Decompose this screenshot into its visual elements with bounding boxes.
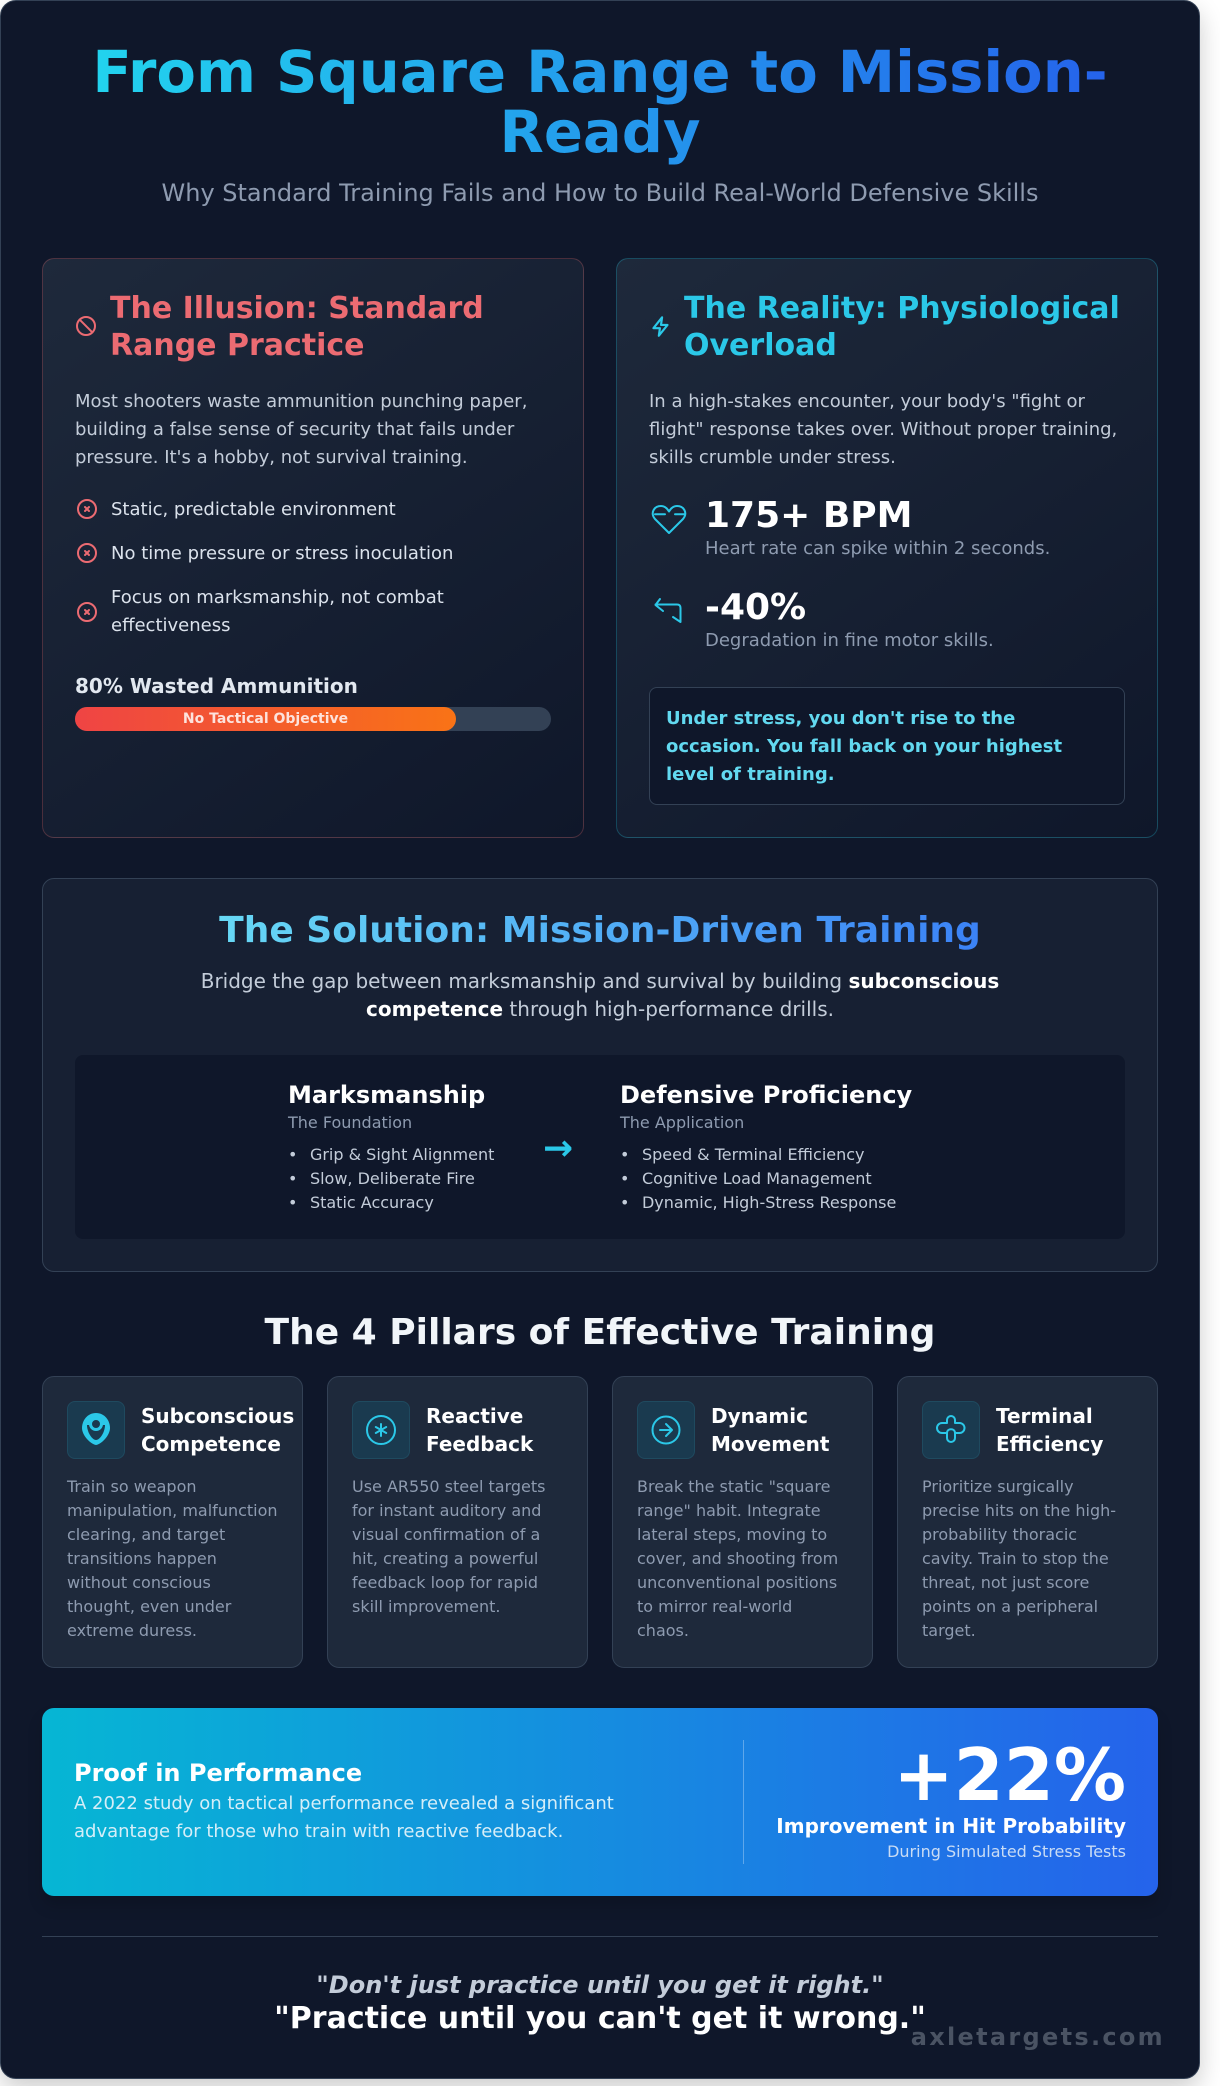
title: Movement [711, 1432, 829, 1456]
description [66, 1477, 278, 1640]
icon: cross target [922, 1401, 980, 1459]
arrow: → [543, 1128, 573, 1169]
text: illusion intro: pressure. It's a hobby, not survival training. [75, 446, 468, 468]
list: marksmanship skills: • Grip & Sight Alignment [288, 1145, 494, 1164]
text: illusion intro: Most shooters waste ammunition punching paper, [75, 390, 527, 412]
heading: proof: Proof in Performance [74, 1759, 362, 1787]
panel: comparison [75, 1055, 1125, 1239]
description: Break the static "square [637, 1477, 830, 1496]
icon: zap [652, 316, 669, 337]
icon: x circle [77, 602, 97, 622]
description: range" habit. Integrate [637, 1501, 821, 1520]
column: marksmanship [288, 1081, 494, 1212]
text: reality intro [649, 390, 1117, 468]
title: Reactive [426, 1404, 523, 1428]
caption: motor skills: Degradation in fine motor skills. [705, 630, 994, 651]
description: Prioritize surgically [922, 1477, 1074, 1496]
stat: motor skills [654, 587, 994, 651]
text: reality intro: In a high-stakes encounter, your body's "fight or [649, 390, 1085, 412]
callout: fall back on training: level of training. [666, 764, 835, 785]
title: Dynamic [711, 1404, 808, 1428]
panel: pillar reactive feedback [327, 1376, 588, 1668]
heading: the illusion: Range Practice [110, 328, 365, 362]
column: defensive proficiency [620, 1081, 912, 1212]
list: defensive skills [620, 1145, 896, 1212]
callout: fall back on training [649, 687, 1125, 805]
callout: fall back on training: Under stress, you don't rise to the [666, 708, 1015, 729]
description [637, 1477, 838, 1640]
item: static environment: Static, predictable environment [111, 498, 396, 520]
description: clearing, and target [67, 1525, 225, 1544]
item: marksmanship focus: effectiveness [111, 614, 230, 636]
description: visual confirmation of a [352, 1525, 540, 1544]
text: reality intro: flight" response takes over. Without proper training, [649, 418, 1117, 440]
icon: broken arrow [654, 598, 682, 623]
divider [743, 1740, 744, 1864]
heading: the solution: The Solution: Mission-Driven Training [219, 910, 981, 951]
description: to mirror real-world [637, 1597, 792, 1616]
description: Use AR550 steel targets [352, 1477, 545, 1496]
description: chaos. [637, 1621, 689, 1640]
text: study: A 2022 study on tactical performance revealed a significant [74, 1793, 614, 1814]
description: precise hits on the high- [922, 1501, 1116, 1520]
quote line two: "Practice until you can't get it wrong." [274, 2001, 926, 2036]
panel: pillar terminal efficiency [897, 1376, 1158, 1668]
description: manipulation, malfunction [67, 1501, 278, 1520]
list: marksmanship skills: • Slow, Deliberate Fire [288, 1169, 475, 1188]
text: solution intro: Bridge the gap between marksmanship and survival by building subconscious [201, 969, 999, 993]
description: points on a peripheral [922, 1597, 1098, 1616]
callout: fall back on training: occasion. You fall back on your highest [666, 736, 1062, 757]
value: 175+ BPM: 175+ BPM [705, 495, 912, 536]
subtitle: Why Standard Training Fails and How to Build Real-World Defensive Skills [162, 179, 1038, 207]
item: marksmanship focus: Focus on marksmanship, not combat [111, 586, 444, 608]
bar fill: 80 percent: No Tactical Objective [183, 711, 348, 727]
panel: the illusion [42, 258, 584, 838]
list: illusion flaws [77, 498, 453, 636]
description: Train so weapon [67, 1477, 197, 1496]
label: wasted ammunition: 80% Wasted Ammunition [75, 674, 358, 698]
heading: the reality: Overload [684, 328, 837, 362]
list: defensive skills: • Cognitive Load Management [620, 1169, 872, 1188]
description: thought, even under [67, 1597, 231, 1616]
text: reality intro: skills crumble under stress. [649, 446, 896, 468]
text: solution intro: competence through high-performance drills. [366, 997, 834, 1021]
list: marksmanship skills: • Static Accuracy [288, 1193, 434, 1212]
panel: proof in performance [42, 1708, 1158, 1896]
heading: the illusion [110, 291, 484, 362]
title [711, 1404, 829, 1456]
description: cover, and shooting from [637, 1549, 838, 1568]
text: illusion intro [75, 390, 527, 468]
heading: the reality: The Reality: Physiological [684, 291, 1120, 326]
list: defensive skills: • Speed & Terminal Efficiency [620, 1145, 865, 1164]
description: cavity. Train to stop the [922, 1549, 1109, 1568]
icon: brain [67, 1401, 125, 1459]
text: solution intro [201, 969, 999, 1021]
title: Ready [499, 99, 701, 166]
title [996, 1404, 1103, 1456]
stat: heart rate [652, 495, 1050, 559]
description [352, 1477, 545, 1616]
description: unconventional positions [637, 1573, 837, 1592]
title [426, 1404, 534, 1456]
icon: x circle [77, 499, 97, 519]
caption: heart rate: Heart rate can spike within 2 seconds. [705, 538, 1050, 559]
title: Terminal [996, 1404, 1093, 1428]
icon: heart pulse [652, 505, 686, 534]
list: marksmanship skills [288, 1145, 494, 1212]
text: illusion intro: building a false sense of security that fails under [75, 418, 514, 440]
item: no time pressure: No time pressure or stress inoculation [111, 542, 453, 564]
title: From Square Range to Mission- [92, 39, 1108, 106]
icon: ban [76, 316, 96, 336]
title: Subconscious [141, 1404, 294, 1428]
stat caption: During Simulated Stress Tests [887, 1842, 1126, 1861]
description: transitions happen [67, 1549, 217, 1568]
text: study [74, 1793, 614, 1842]
title [141, 1404, 294, 1456]
description [922, 1477, 1116, 1640]
heading: defensive proficiency: Defensive Proficiency [620, 1081, 912, 1109]
title: Feedback [426, 1432, 533, 1456]
description: without conscious [67, 1573, 211, 1592]
description: hit, creating a powerful [352, 1549, 538, 1568]
icon: target burst [352, 1401, 410, 1459]
description: for instant auditory and [352, 1501, 541, 1520]
description: extreme duress. [67, 1621, 197, 1640]
quote line one: "Don't just practice until you get it right." [316, 1971, 884, 1999]
list: defensive skills: • Dynamic, High-Stress Response [620, 1193, 896, 1212]
watermark: axletargets.com [911, 2023, 1165, 2051]
icon: circle arrow [637, 1401, 695, 1459]
description: lateral steps, moving to [637, 1525, 827, 1544]
description: threat, not just score [922, 1573, 1089, 1592]
description: feedback loop for rapid [352, 1573, 538, 1592]
title [92, 39, 1108, 166]
title: Competence [141, 1432, 281, 1456]
heading: the illusion: The Illusion: Standard [110, 291, 484, 326]
item: marksmanship focus [111, 586, 444, 636]
stat: +22 percent: +22% [893, 1733, 1126, 1817]
heading: the reality [684, 291, 1120, 362]
bar fill: 80 percent [75, 707, 456, 731]
panel: pillar subconscious competence [42, 1376, 303, 1668]
panel: the reality [616, 258, 1158, 838]
description: skill improvement. [352, 1597, 500, 1616]
heading: marksmanship: Marksmanship [288, 1081, 485, 1109]
text: study: advantage for those who train with reactive feedback. [74, 1821, 563, 1842]
description: probability thoracic [922, 1525, 1077, 1544]
stat label: Improvement in Hit Probability [776, 1814, 1126, 1838]
bar chart: wasted ammunition [75, 707, 551, 731]
heading: four pillars: The 4 Pillars of Effective Training [265, 1312, 935, 1353]
icon: x circle [77, 543, 97, 563]
caption: application: The Application [620, 1113, 744, 1132]
title: Efficiency [996, 1432, 1103, 1456]
caption: foundation: The Foundation [288, 1113, 412, 1132]
value: -40%: -40% [705, 587, 806, 628]
description: target. [922, 1621, 976, 1640]
panel: pillar dynamic movement [612, 1376, 873, 1668]
panel: the solution [42, 878, 1158, 1272]
